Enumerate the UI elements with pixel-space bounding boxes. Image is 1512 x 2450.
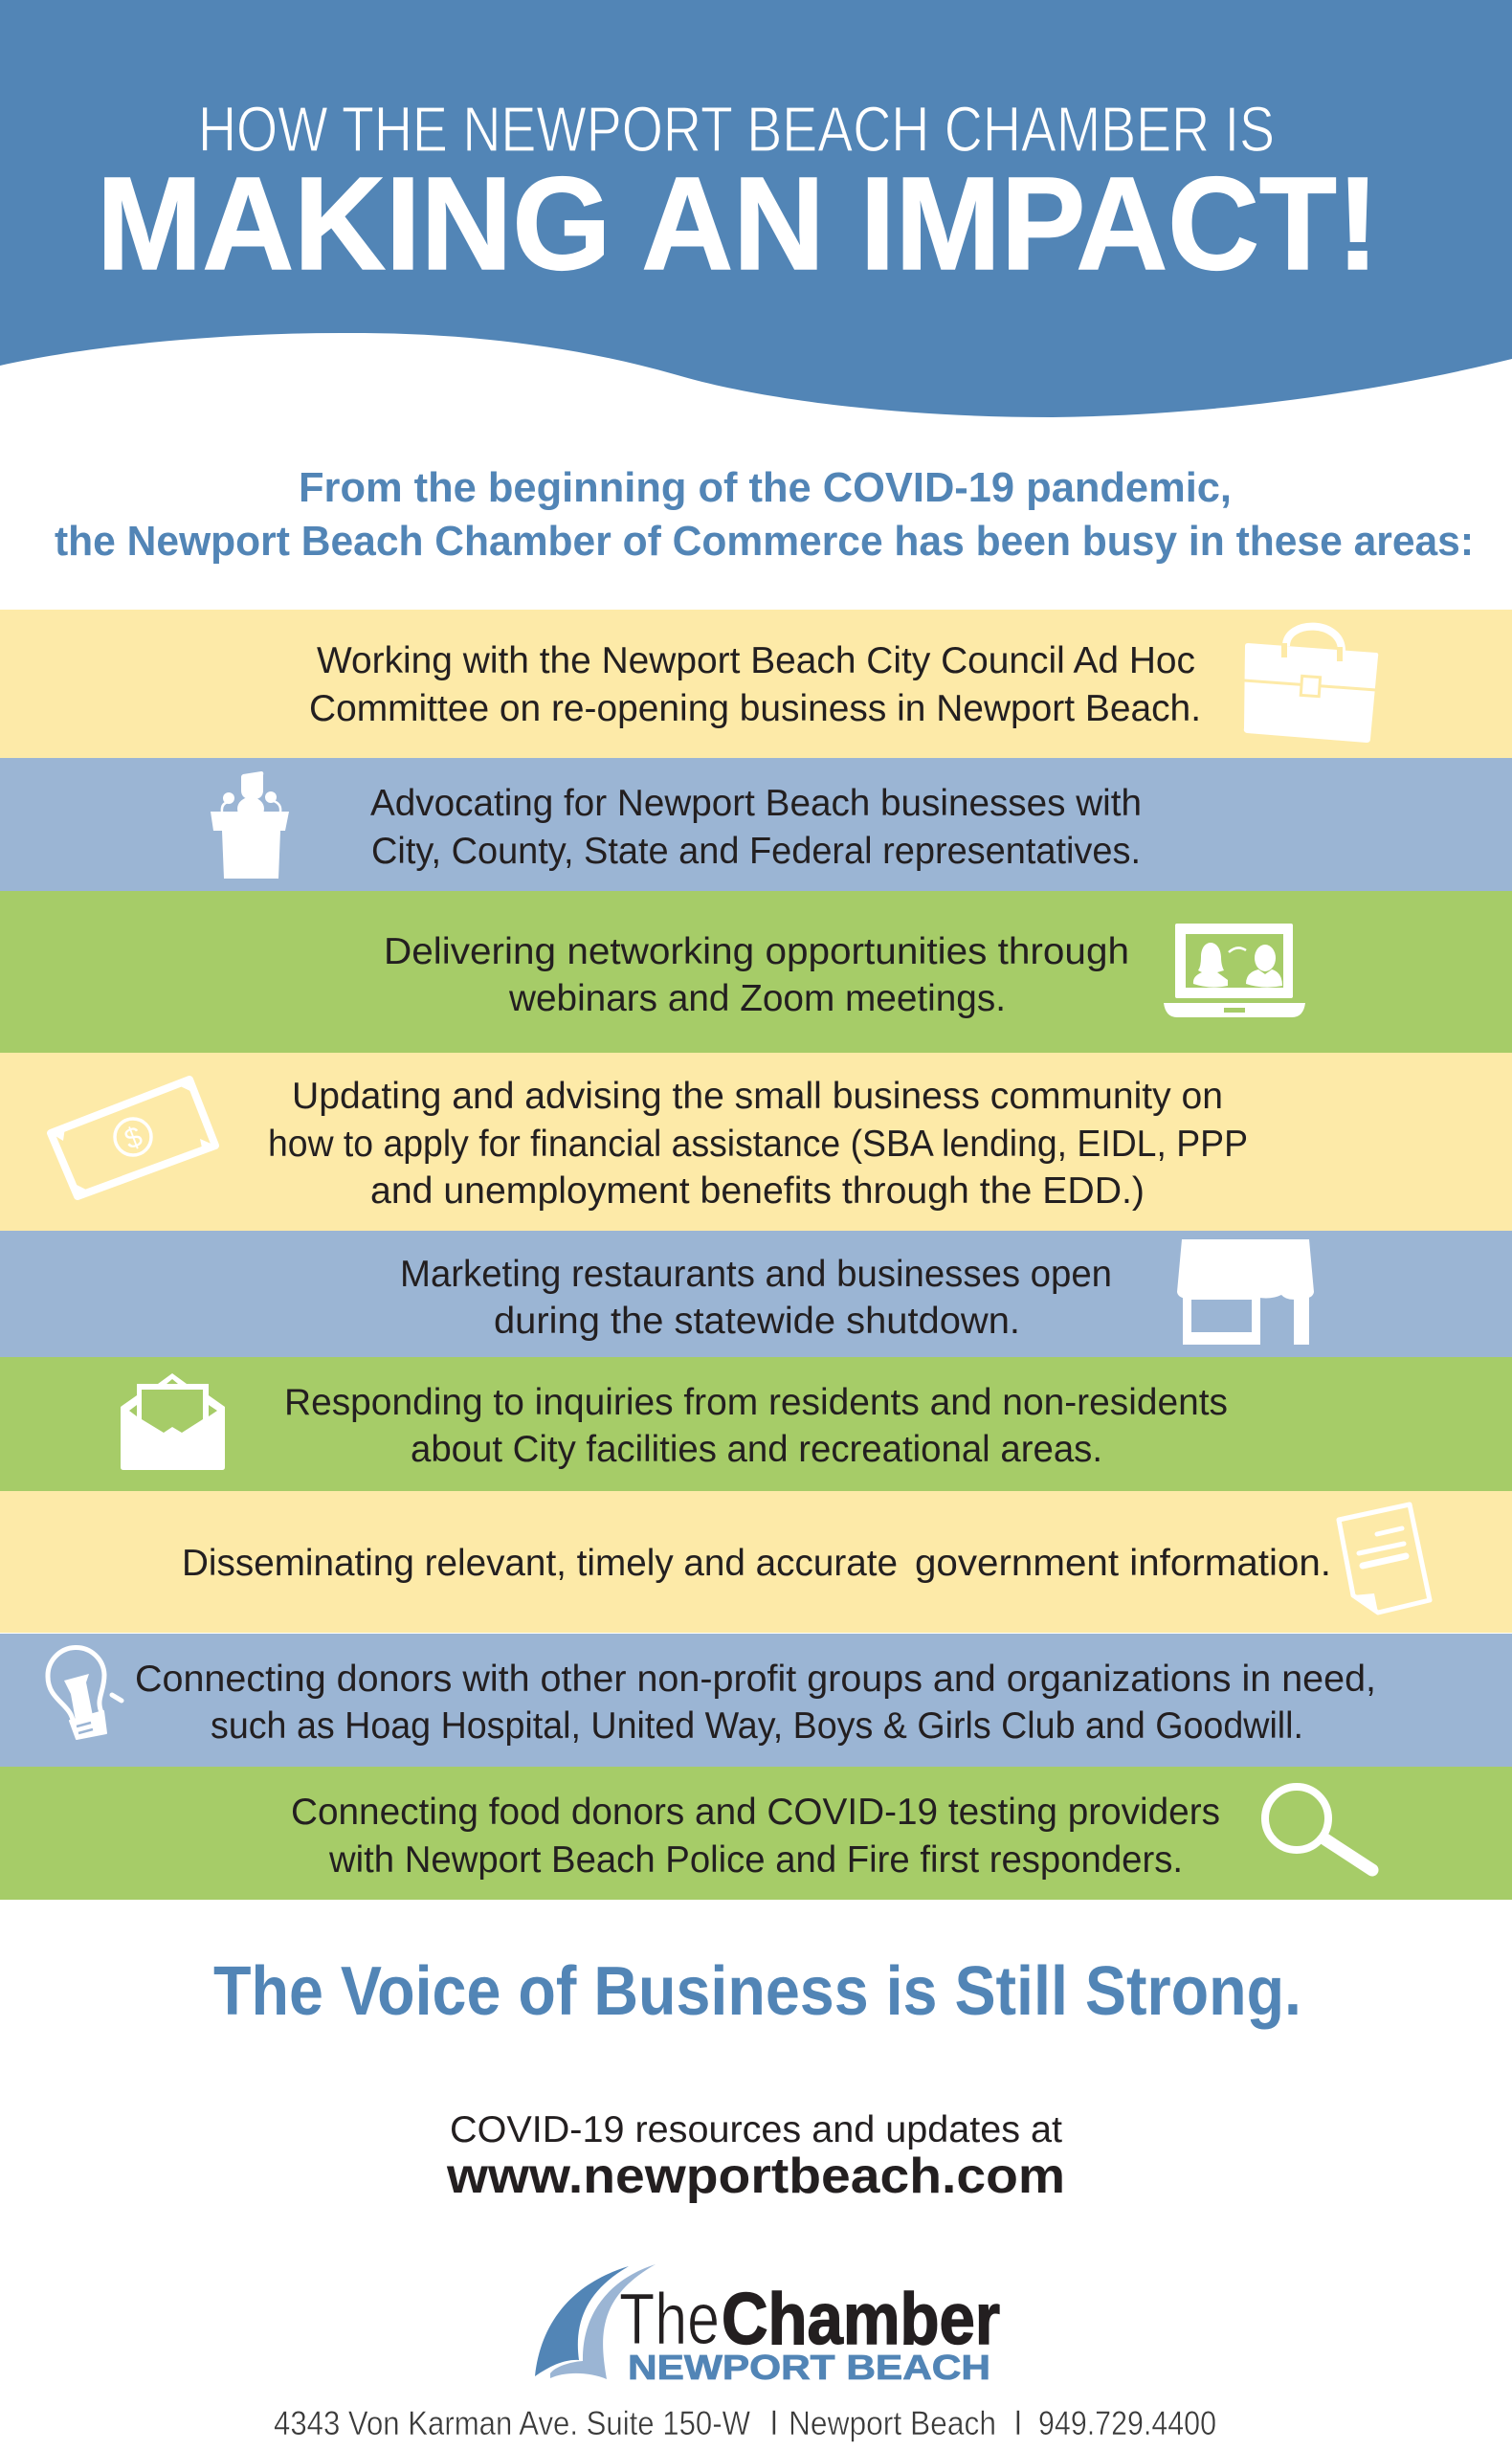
logo: wordmark: The: [619, 2279, 720, 2360]
title: first line: HOW THE NEWPORT BEACH CHAMBER IS: [198, 94, 1275, 166]
intro heading: the Newport Beach Chamber of Commerce has been busy in these areas:: [55, 518, 1474, 565]
icon: podium: [211, 771, 289, 879]
icon: dollar bill: [51, 1080, 215, 1196]
text: financial assistance: Updating and advising the small business community on: [292, 1076, 1223, 1117]
title: second line: MAKING AN IMPACT!: [97, 150, 1379, 298]
text: inquiries: Responding to inquiries from residents and non-residents: [284, 1382, 1228, 1423]
text: food donors: with Newport Beach Police and Fire first responders.: [328, 1839, 1183, 1881]
text: networking: webinars and Zoom meetings.: [508, 978, 1006, 1019]
resources line: COVID-19 resources and updates at: [450, 2109, 1062, 2150]
logo: [535, 2264, 1000, 2387]
intro heading: [55, 464, 1474, 565]
text: inquiries: about City facilities and recreational areas.: [411, 1429, 1102, 1470]
panel: city council row: [0, 610, 1512, 758]
text: city council: [309, 640, 1201, 729]
panel: networking row: [0, 891, 1512, 1053]
text: government information: Disseminating relevant, timely and accurate: [182, 1543, 898, 1584]
footer address: [274, 2405, 1216, 2442]
logo: location: NEWPORT BEACH: [628, 2348, 990, 2387]
logo: wordmark bold: Chamber: [722, 2279, 1000, 2360]
text: financial assistance: how to apply for financial assistance (SBA lending, EIDL, PPP: [268, 1124, 1248, 1165]
text: marketing: Marketing restaurants and businesses open: [400, 1254, 1112, 1295]
website: www.newportbeach.com: [446, 2149, 1065, 2204]
icon: dollar bill: $: [121, 1121, 147, 1156]
text: inquiries: [284, 1382, 1228, 1470]
panel: advocating row: [0, 758, 1512, 891]
header banner with wave: [0, 0, 1512, 417]
text: advocating: City, County, State and Federal representatives.: [371, 831, 1141, 872]
text: government information: government information.: [915, 1543, 1331, 1584]
text: government information: [182, 1543, 1331, 1584]
icon: open envelope: [121, 1373, 225, 1470]
text: city council: Working with the Newport Beach City Council Ad Hoc: [317, 640, 1195, 681]
footer address: l: [1014, 2405, 1022, 2442]
panel: government information row: [0, 1491, 1512, 1633]
text: marketing: [400, 1254, 1112, 1342]
panel: financial assistance row: [0, 1053, 1512, 1231]
icon: briefcase: [1244, 627, 1378, 743]
text: advocating: Advocating for Newport Beach businesses with: [370, 783, 1142, 824]
footer address: 4343 Von Karman Ave. Suite 150-W: [274, 2405, 750, 2442]
text: donors: [135, 1659, 1376, 1747]
icon: document: [1339, 1504, 1430, 1613]
text: financial assistance: and unemployment benefits through the EDD.): [370, 1170, 1145, 1212]
logo: sail: [535, 2264, 656, 2379]
text: advocating: [370, 783, 1142, 872]
text: food donors: [291, 1792, 1220, 1881]
footer address: Newport Beach: [789, 2405, 996, 2442]
footer address: 949.729.4400: [1038, 2405, 1216, 2442]
panel: food donors row: [0, 1767, 1512, 1900]
text: food donors: Connecting food donors and COVID-19 testing providers: [291, 1792, 1220, 1833]
text: donors: Connecting donors with other non-profit groups and organizations in need,: [135, 1659, 1376, 1700]
icon: light bulb: [48, 1647, 122, 1739]
text: networking: [384, 931, 1129, 1019]
icon: storefront: [1177, 1239, 1314, 1345]
panel: marketing row: [0, 1231, 1512, 1357]
text: city council: Committee on re-opening business in Newport Beach.: [309, 688, 1201, 729]
icon: magnifying glass: [1265, 1787, 1372, 1870]
text: networking: Delivering networking opportunities through: [384, 931, 1129, 972]
footer address: l: [770, 2405, 778, 2442]
text: donors: such as Hoag Hospital, United Way, Boys & Girls Club and Goodwill.: [211, 1705, 1303, 1747]
intro heading: From the beginning of the COVID-19 pandemic,: [299, 464, 1232, 511]
panel: donors row: [0, 1634, 1512, 1767]
text: marketing: during the statewide shutdown.: [494, 1301, 1020, 1342]
panel: inquiries row: [0, 1357, 1512, 1491]
icon: laptop: [1164, 924, 1305, 1017]
tagline: The Voice of Business is Still Strong.: [213, 1953, 1301, 2030]
text: financial assistance: [268, 1076, 1248, 1212]
